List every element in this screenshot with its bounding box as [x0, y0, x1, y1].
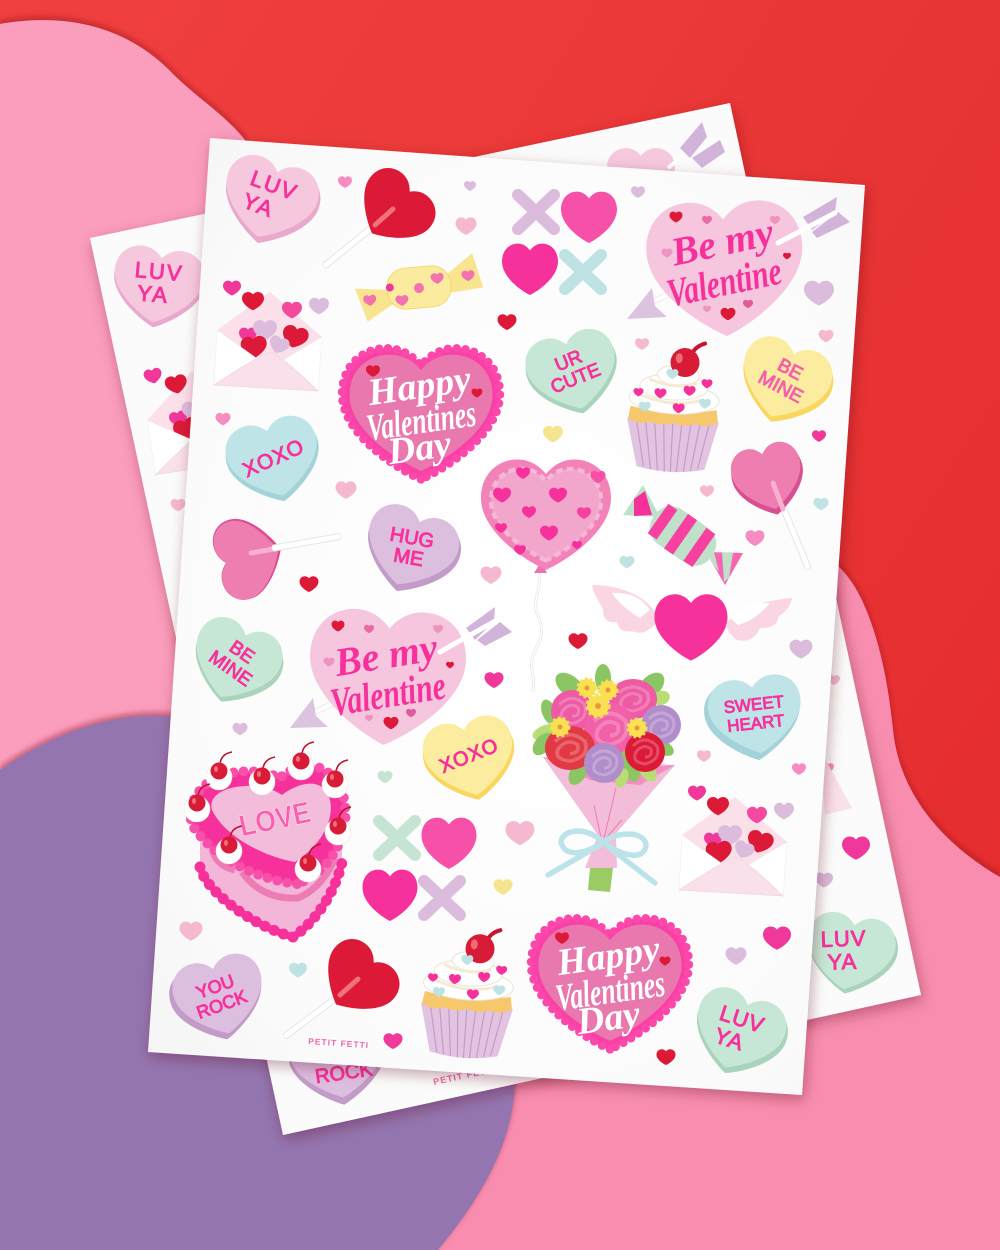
arrow: [627, 197, 850, 319]
left wrap: [623, 485, 660, 517]
candy heart: LUV YA green: LUV: [717, 1000, 768, 1038]
big heart: Be my Valentine top: Valentine: [663, 248, 786, 316]
envelope with hearts top: [214, 281, 329, 391]
heart balloon: [481, 459, 611, 692]
leaves: [529, 664, 677, 789]
heart cake: LOVE: [236, 796, 314, 843]
envelope back right: [820, 750, 852, 815]
background: purple blob: [0, 716, 515, 1250]
candy heart: LUV YA green: YA: [711, 1023, 747, 1056]
right wing: [727, 598, 792, 641]
candy heart: LUV YA back: YA: [136, 280, 170, 308]
cupcake bottom: [417, 925, 518, 1061]
main sheet paper: [148, 138, 865, 1095]
candy heart: XOXO yellow: [417, 711, 524, 809]
candy heart: UR CUTE: CUTE: [548, 360, 604, 398]
candy heart: HUG ME: ME: [392, 544, 425, 571]
daisies: [578, 679, 596, 697]
candy heart: YOU ROCK: ROCK: [194, 986, 250, 1023]
candy heart: YOU ROCK: YOU: [193, 971, 237, 1003]
back sticker sheet: [90, 103, 921, 1135]
roses: [551, 690, 593, 732]
background: pink lower right blob: [400, 566, 1000, 1250]
lollipop: red top: [325, 159, 444, 265]
lace heart: Happy Valentines Day bottom: Happy: [553, 928, 663, 984]
top tier: [191, 766, 346, 884]
big heart: Be my Valentine left: [290, 607, 512, 749]
big heart: Be my Valentine left: Valentine: [327, 662, 449, 725]
lace heart: Happy Valentines Day bottom: Day: [573, 993, 643, 1043]
lower tier: [200, 840, 342, 937]
candy heart: HUG ME: HUG: [388, 523, 436, 553]
brand back: PETIT FETTI: [432, 1064, 497, 1087]
candy heart: BE MINE green: MINE: [205, 647, 256, 691]
candy heart: BE MINE yellow: BE: [774, 355, 806, 385]
back sheet paper: [90, 103, 921, 1135]
arrow back top: [607, 122, 725, 205]
ribbon: [548, 831, 655, 883]
candy heart: BE MINE green: BE: [225, 637, 258, 668]
candy heart: ROCK back: ROCK: [314, 1058, 375, 1088]
candy heart: ROCK back: [284, 1017, 393, 1112]
XO cluster top: [502, 192, 617, 295]
candy heart: LUV YA green: [681, 980, 797, 1089]
bouquet: [529, 664, 681, 892]
candy heart: LUV YA green back: [799, 908, 903, 1001]
cherries: [206, 752, 232, 790]
arrow: [290, 607, 512, 728]
wrap: [543, 757, 675, 868]
lace heart: Happy Valentines Day top: [342, 348, 500, 479]
envelope with hearts bottom: [679, 786, 794, 896]
candy heart: LUV YA back: LUV: [134, 257, 185, 286]
lollipop: pink right: [726, 438, 813, 567]
candy heart: LUV YA back: [108, 242, 210, 334]
heart cake: [184, 742, 351, 937]
lace heart: Happy Valentines Day top: Day: [384, 423, 454, 473]
big heart: Be my Valentine top: Be my: [666, 209, 778, 275]
candy heart: LUV YA green back: YA: [827, 949, 858, 975]
candy heart: LUV YA: YA: [239, 188, 278, 222]
candy heart: XOXO yellow: XOXO: [436, 734, 502, 778]
candy heart: LUV YA: [211, 148, 328, 257]
candy heart: YOU ROCK: [163, 948, 274, 1051]
right wrap: [706, 552, 743, 585]
main sticker sheet: [148, 138, 865, 1095]
XO cluster bottom: [362, 818, 476, 921]
lace heart: Happy Valentines Day top: Happy: [364, 358, 474, 414]
candy heart: UR CUTE: UR: [552, 346, 585, 376]
candy heart: BE MINE yellow: [727, 329, 842, 437]
winged heart: [592, 585, 792, 661]
stems: [588, 868, 613, 892]
candy heart: UR CUTE: [519, 323, 628, 425]
brand: Petit Fetti: PETIT FETTI: [308, 1036, 369, 1050]
lollipop: pink left: [208, 509, 339, 605]
candy: yellow wrapped: [353, 253, 485, 322]
candy heart: BE MINE yellow: MINE: [755, 367, 806, 408]
left wing: [592, 585, 655, 633]
big heart: Be my Valentine top: [627, 197, 850, 339]
lollipop: red bottom: [286, 930, 408, 1036]
candy heart: LUV YA green back: LUV: [820, 925, 867, 952]
big heart: Be my Valentine left: Be my: [330, 624, 441, 685]
small heart confetti: [180, 176, 834, 1065]
candy heart: XOXO blue: XOXO: [240, 435, 308, 482]
lace heart: Happy Valentines Day bottom: Valentines: [553, 963, 668, 1020]
candy heart: SWEET HEART: SWEET: [723, 692, 785, 717]
candy heart: HUG ME: [352, 497, 470, 607]
cupcake top: [624, 340, 723, 474]
background: light pink left blob: [0, 20, 320, 790]
candy heart: XOXO blue: [219, 410, 330, 513]
candy: striped wrapped: [623, 485, 743, 585]
candy heart: SWEET HEART: HEART: [726, 711, 785, 736]
candy heart: SWEET HEART: [700, 671, 808, 767]
candy heart: LUV YA: LUV: [247, 165, 302, 206]
candy heart: BE MINE green: [179, 610, 293, 718]
small hearts back: [170, 499, 870, 888]
body: [642, 499, 724, 573]
envelope back left: [134, 349, 269, 481]
lace heart: Happy Valentines Day top: Valentines: [364, 393, 479, 450]
lace heart: Happy Valentines Day bottom: [531, 918, 689, 1049]
